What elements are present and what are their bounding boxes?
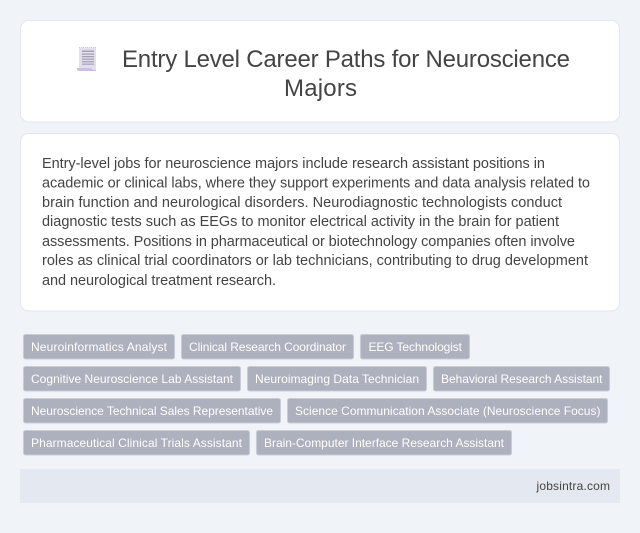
tag: Brain-Computer Interface Research Assistant: Brain-Computer Interface Research Assistant	[264, 436, 505, 450]
tag: Clinical Research Coordinator: Clinical Research Coordinator	[189, 340, 346, 354]
tag: Clinical Research Coordinator	[182, 334, 354, 359]
text block: description: Entry-level jobs for neuroscience majors include research assistant positions in	[42, 156, 545, 172]
icon: scroll document	[77, 48, 96, 71]
tag: EEG Technologist	[360, 334, 470, 359]
heading: title: Entry Level Career Paths for Neuroscience	[122, 46, 570, 73]
tag: Brain-Computer Interface Research Assistant	[256, 430, 512, 455]
tag: Neuroinformatics Analyst	[24, 334, 174, 359]
tag: Science Communication Associate (Neuroscience Focus): Science Communication Associate (Neuroscience Focus)	[295, 404, 600, 418]
tag: Neuroinformatics Analyst: Neuroinformatics Analyst	[31, 340, 168, 354]
tag: Pharmaceutical Clinical Trials Assistant	[24, 430, 250, 455]
tag: Neuroimaging Data Technician: Neuroimaging Data Technician	[255, 372, 419, 386]
heading: title	[122, 46, 570, 102]
tag: Cognitive Neuroscience Lab Assistant	[24, 366, 240, 391]
tag: Behavioral Research Assistant	[434, 366, 610, 391]
tag: Neuroscience Technical Sales Representative	[24, 398, 280, 423]
tag: Science Communication Associate (Neuroscience Focus)	[288, 398, 608, 423]
text block: description: diagnostic tests such as EEGs to monitor electrical activity in the brain for patient	[42, 214, 559, 230]
tag: Cognitive Neuroscience Lab Assistant: Cognitive Neuroscience Lab Assistant	[31, 372, 234, 386]
tag: Pharmaceutical Clinical Trials Assistant: Pharmaceutical Clinical Trials Assistant	[31, 436, 243, 450]
heading: title: Majors	[284, 75, 357, 102]
text block: description: academic or clinical labs, where they support experiments and data analysis related to	[42, 176, 590, 192]
footer bar	[20, 469, 620, 503]
tag list: career paths	[24, 334, 610, 455]
text block: description	[42, 156, 590, 289]
tag: Neuroimaging Data Technician	[248, 366, 426, 391]
tag: Neuroscience Technical Sales Representative: Neuroscience Technical Sales Representative	[31, 404, 273, 418]
tag: Behavioral Research Assistant: Behavioral Research Assistant	[441, 372, 603, 386]
text block: description: and neurological treatment research.	[42, 273, 276, 289]
text block: description: brain function and neurological disorders. Neurodiagnostic technologists conduct	[42, 195, 562, 211]
footer: source credit: jobsintra.com	[536, 479, 610, 493]
panel: description card	[20, 134, 620, 311]
tag: EEG Technologist: EEG Technologist	[368, 340, 463, 354]
text block: description: roles as clinical trial coordinators or lab technicians, contributing to drug development	[42, 253, 588, 269]
text block: description: assessments. Positions in pharmaceutical or biotechnology companies often involve	[42, 234, 575, 250]
panel: title card	[20, 20, 620, 122]
